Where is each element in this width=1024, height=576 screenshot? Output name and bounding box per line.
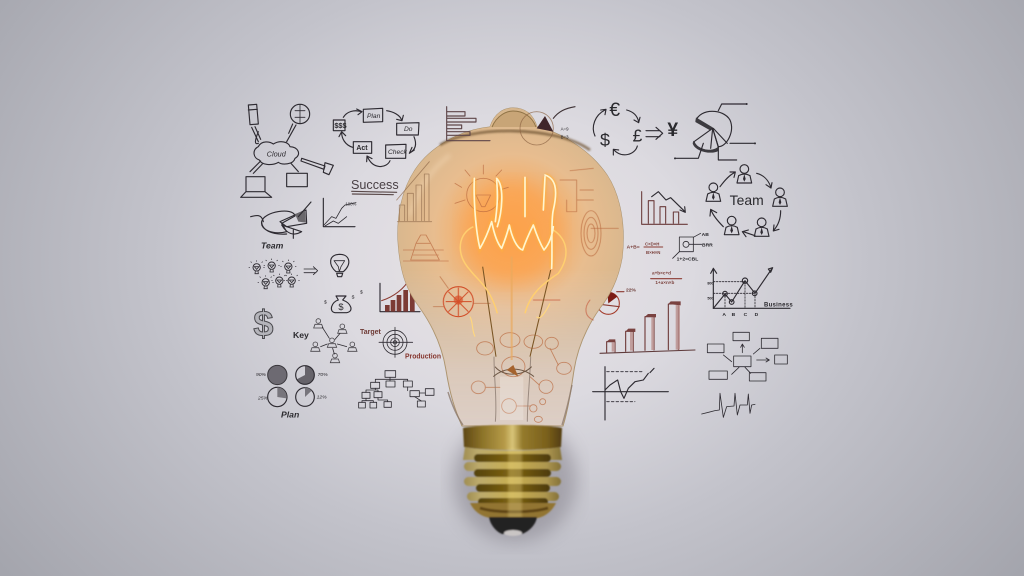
icon: plan do check act cycle [333,108,419,167]
chart: Business line chart: A [722,312,726,318]
icon: money bag: $ [338,302,344,312]
text: formulas: 1+a×n×b [655,280,675,285]
icon: cloud computing diagram [241,104,333,197]
text: formulas: a+b×c+d [652,270,671,275]
sketches: right group [583,100,793,420]
chart: Business line chart: B [732,312,736,318]
icon: team pie chart [251,202,311,250]
chart: rising 3D bars [600,301,695,353]
icon: currency exchange cycle: € [609,100,620,121]
light bulb [397,107,623,536]
text: formulas: B×H×N [646,250,660,255]
heading: Success: Success [351,178,399,192]
text: formulas: C×D×H [645,241,659,246]
icon: idea bulb [331,254,349,277]
icon: team cycle [706,165,787,237]
chart: organisation tree [359,371,434,408]
chart: plan pies: 90% [256,372,267,378]
icon: square component: 1+2=CBL [677,257,698,263]
glass envelope [398,108,623,426]
chart: Business line chart: Business [764,302,793,308]
icon: currency exchange cycle: £ [633,126,643,146]
sketches seen through glass: A=9 [561,127,569,132]
chart: red pie outside bulb: 22% [626,287,637,293]
icon: plan do check act cycle: Plan [367,113,381,120]
chart: red pie outside bulb: 64% [583,318,592,323]
chart: Business line chart: D [755,312,759,318]
icon: plan do check act cycle: Do [404,126,413,133]
sketches seen through glass: B=3 [561,134,569,139]
chart: Business line chart: 500 [707,296,713,300]
black contact tip [489,517,537,534]
icon: money bag: $ [352,294,355,300]
thread ridges [463,447,562,518]
chart: flow boxes [707,332,787,381]
chart: exploded pie with callouts [674,103,756,160]
icon: square component: AB [702,232,709,238]
icon: money bag [324,289,363,313]
icon: square component: BRR [702,243,713,249]
icon: plan do check act cycle: Check [388,149,408,156]
icon: team pie chart: Team [261,240,284,250]
text: Target: Target [360,329,381,336]
sketches seen through glass [397,107,618,422]
text: formulas: A+B= [627,244,640,250]
chart: red pie outside bulb [583,287,637,323]
sketches: left group [241,104,441,419]
pie behind bulb neck [520,112,553,145]
chart: plan pies [256,365,328,419]
icon: plan do check act cycle: Act [356,145,368,152]
icon: currency exchange cycle: ¥ [667,120,678,141]
chart: red rising bars [380,278,420,312]
icon: small light bulbs and arrow [249,259,318,289]
filament supports and stem [483,257,551,422]
icon: target [379,327,413,357]
chart: plan pies: 12% [317,394,327,400]
puzzle and chart [560,168,593,212]
chart: rising line: 100% [345,201,357,206]
icon: currency exchange cycle: $ [600,130,610,150]
icon: currency exchange cycle [593,100,678,155]
red sketches on the right of glass [533,300,593,320]
chart: stock line [593,367,668,420]
chart: plan pies: 70% [318,372,328,378]
chart: rising line [323,198,357,227]
pyramid [403,235,448,261]
bulb collar [463,425,562,450]
text: formulas [627,241,682,285]
icon: people network [311,319,357,363]
idea bulb sketch [467,178,500,212]
icon: money bag: $ [324,299,327,305]
text: Production: Production [405,352,441,361]
bar chart and success line [397,162,432,222]
chart: pulse line [702,393,755,417]
icon: square component [673,232,713,263]
icon: team cycle: Team [730,192,764,208]
bulb shadow on wall [453,418,577,542]
brass screw base [463,425,562,536]
red wheel [443,287,473,317]
icon: money bag: $ [360,289,363,295]
chart: falling bars [642,192,687,224]
chart: plan pies: 25% [257,395,269,401]
filament wire [474,175,556,268]
icon: plan do check act cycle: $$$ [334,121,347,130]
filament glow [460,175,566,337]
chart: Business line chart [707,268,793,318]
chart: plan pies: Plan [281,409,299,419]
target in glass [581,211,601,256]
chart: Business line chart: C [744,312,748,318]
bars top left [447,107,490,141]
icon: cloud computing diagram: Cloud [267,150,287,159]
text: Key: Key [293,330,309,340]
icon: dollar sign: $ [253,303,273,344]
chart: Business line chart: 800 [707,282,713,286]
bubble diagram in bulb [471,381,485,394]
